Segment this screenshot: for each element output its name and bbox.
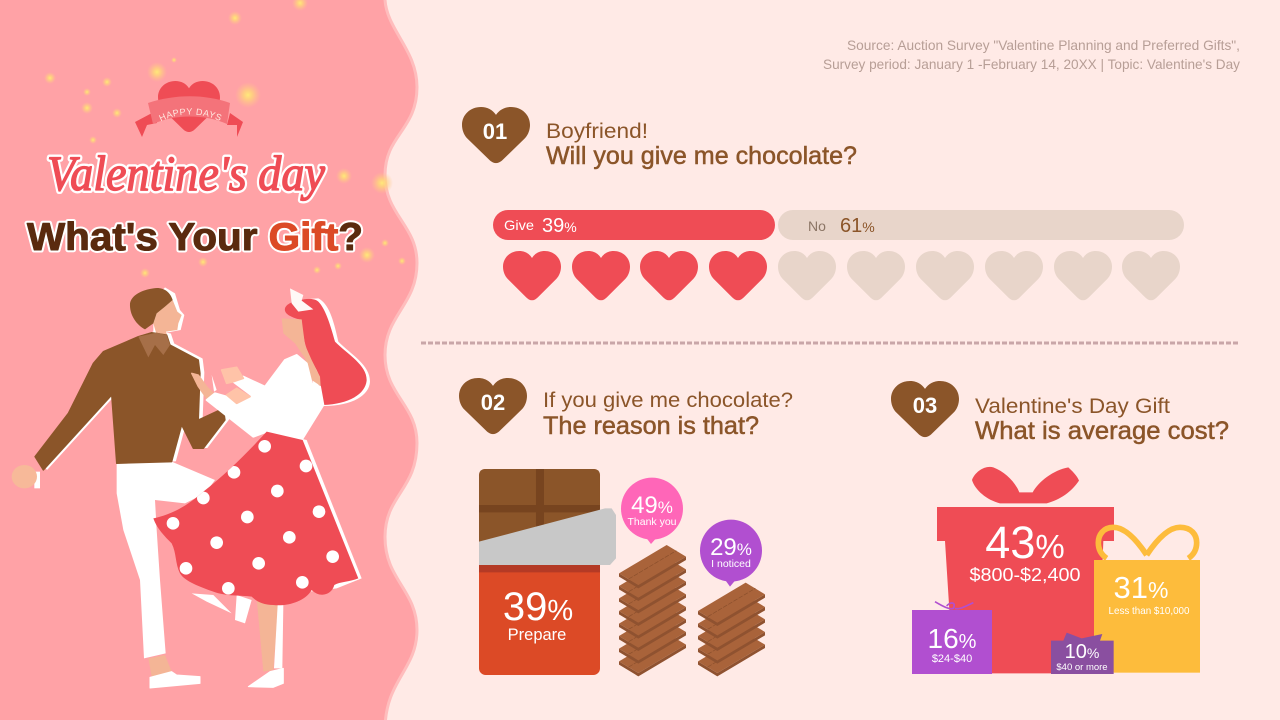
sparkles <box>44 0 406 278</box>
value 43%: $800-$2,400 <box>970 565 1080 585</box>
chart: give or no progress bar: 39% <box>542 215 577 237</box>
title: Valentine's day: Valentine's day <box>47 145 326 201</box>
source note <box>823 37 1240 72</box>
value 49% Thank you: Thank you <box>627 516 677 528</box>
bubble 29% <box>700 520 762 587</box>
red gift 43% <box>937 467 1114 673</box>
badge 02 <box>459 378 527 434</box>
illustration: dancing couple <box>12 287 370 688</box>
value 16%: 16% <box>928 623 977 654</box>
chart: give or no progress bar: No <box>808 218 826 234</box>
heading 01: Boyfriend! <box>546 120 648 143</box>
value 10%: $40 or more <box>1056 662 1108 673</box>
icon: heart ribbon badge <box>135 81 243 137</box>
chart: give or no progress bar: Give <box>504 217 534 233</box>
title: What's Your Gift?: What's Your Gift? <box>27 216 363 259</box>
chart: give or no progress bar: 61% <box>840 215 875 237</box>
value 43%: 43% <box>985 517 1065 568</box>
chocolate bar 39% <box>479 469 616 675</box>
badge 03 <box>891 381 959 437</box>
title: Valentine's day: Valentine's day <box>47 145 326 201</box>
badge 03: 03 <box>913 393 937 418</box>
stack of chocolate pieces 29% <box>698 583 765 676</box>
value 16%: $24-$40 <box>932 653 972 665</box>
section 03 header <box>891 381 1229 445</box>
labels: chocolate values <box>503 492 752 644</box>
value 10%: 10% <box>1065 641 1099 663</box>
value 49% Thank you <box>627 492 677 528</box>
value 10% <box>1056 641 1108 673</box>
badge 02: 02 <box>481 390 505 415</box>
heading 02: If you give me chocolate? <box>543 389 793 412</box>
pictogram: ten hearts <box>503 251 1180 300</box>
value 31%: Less than $10,000 <box>1108 605 1190 617</box>
value 31% <box>1108 570 1190 617</box>
value 49% Thank you: 49% <box>631 492 673 519</box>
section 02 header <box>459 378 793 440</box>
value 39% Prepare: Prepare <box>508 626 566 644</box>
title: What's Your Gift?: What's Your Gift? <box>27 216 363 259</box>
source note: Source: Auction Survey "Valentine Planning and Preferred Gifts", <box>847 37 1240 53</box>
panel: left wavy pink panel <box>0 0 417 720</box>
value 39% Prepare: 39% <box>503 585 573 629</box>
heading 03: Valentine's Day Gift <box>975 395 1170 418</box>
heading 03: What is average cost? <box>975 417 1229 445</box>
chart: gift boxes <box>912 467 1200 674</box>
heading 01 <box>546 120 857 170</box>
chart: give or no progress bar <box>493 210 1184 240</box>
source note: Survey period: January 1 -February 14, 20XX | Topic: Valentine's Day <box>823 56 1240 72</box>
section 01 header <box>462 107 857 170</box>
woman <box>153 288 370 687</box>
chart: chocolate graphics <box>479 469 765 676</box>
heading 02: The reason is that? <box>543 412 759 440</box>
bubble 49% <box>621 478 683 544</box>
man <box>12 287 229 688</box>
heading 02 <box>543 389 793 440</box>
badge 01: 01 <box>483 119 507 144</box>
labels: gift values <box>928 517 1190 673</box>
stack of chocolate pieces 49% <box>619 545 686 676</box>
purple gift 16% <box>912 602 992 674</box>
value 29% I noticed: 29% <box>710 534 752 561</box>
heading 03 <box>975 395 1229 445</box>
badge 01 <box>462 107 530 163</box>
heading 01: Will you give me chocolate? <box>546 142 857 170</box>
value 43% <box>970 517 1080 585</box>
dark purple gift 10% <box>1051 633 1114 674</box>
yellow gift 31% <box>1094 527 1200 673</box>
value 31%: 31% <box>1114 570 1168 605</box>
ribbon text: HAPPY DAYS <box>158 108 222 121</box>
value 29% I noticed: I noticed <box>711 558 751 570</box>
